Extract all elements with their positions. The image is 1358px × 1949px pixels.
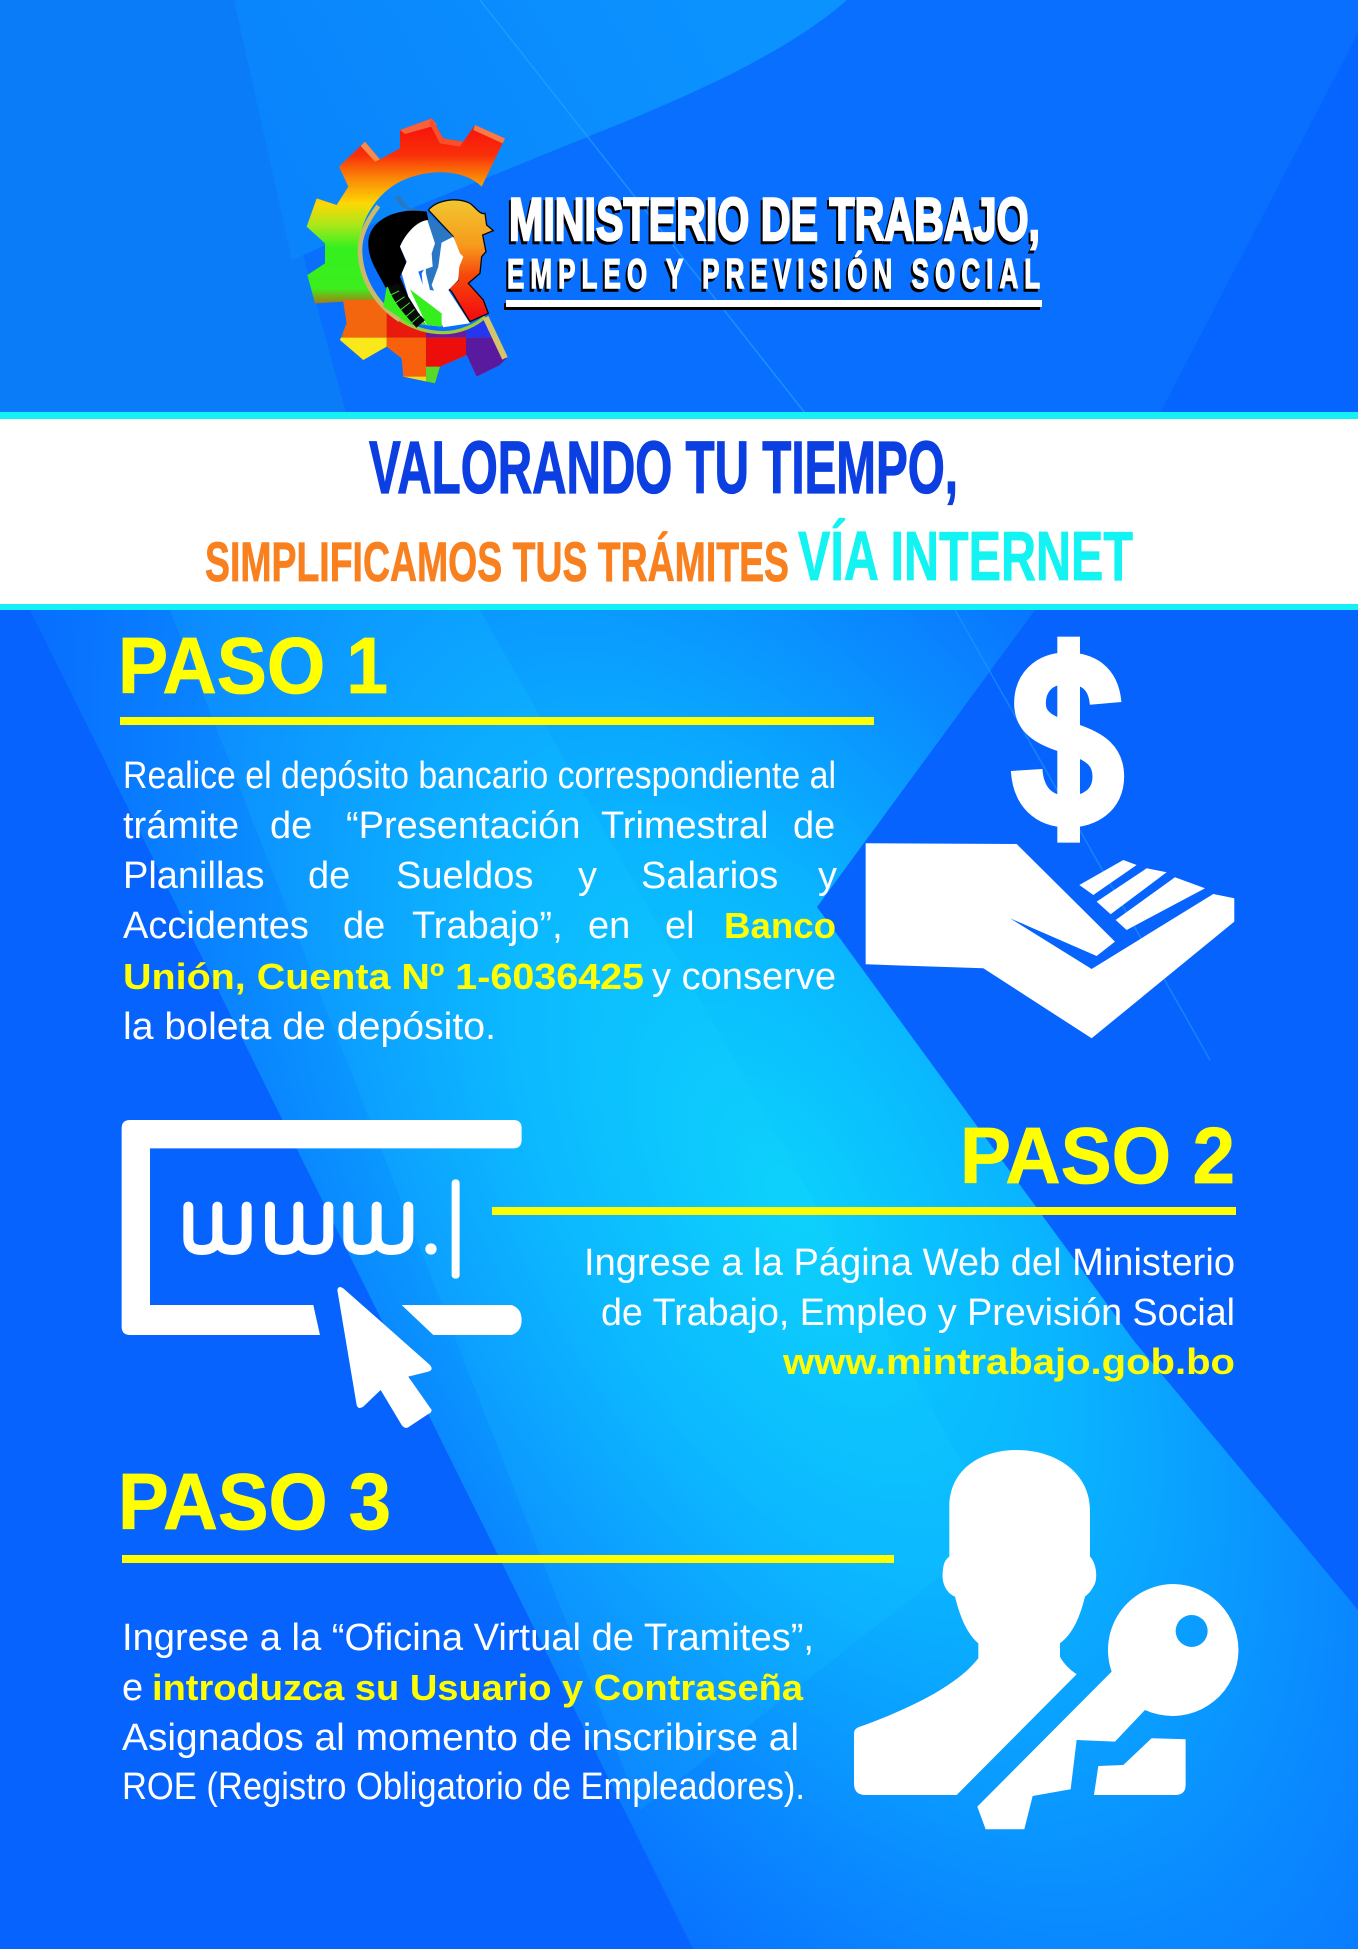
- text: paso 1 body: trámite: [123, 805, 239, 847]
- text: paso 1 body: y: [578, 855, 597, 897]
- heading: paso 1: PASO 1: [118, 621, 388, 710]
- figure: woman with braid: [368, 211, 428, 325]
- text: paso 1 body: Planillas: [123, 855, 265, 897]
- text: paso 3 body: introduzca su Usuario y Contraseña: [152, 1667, 804, 1708]
- text: paso 1 body: Salarios: [641, 855, 778, 897]
- logo text: ministry name: [506, 186, 1042, 307]
- heading: simplificamos: SIMPLIFICAMOS TUS TRÁMITES: [205, 530, 789, 593]
- heading: paso 2: PASO 2: [960, 1111, 1235, 1200]
- text: paso 1 body: de: [343, 905, 385, 947]
- heading: valorando tu tiempo: VALORANDO TU TIEMPO,: [369, 426, 958, 509]
- text: paso 1 body: de: [793, 805, 835, 847]
- text: paso 3 body: ROE (Registro Obligatorio de Empleadores).: [122, 1766, 805, 1808]
- text: paso 3 body: Asignados al momento de inscribirse al: [122, 1717, 799, 1759]
- gear ring: [307, 118, 508, 385]
- text: paso 1 body: la boleta de depósito.: [123, 1006, 496, 1048]
- text: paso 3 body: [122, 1617, 814, 1808]
- text: paso 1 body: el: [665, 905, 695, 947]
- title band: [0, 412, 1358, 610]
- logo: ministry gear emblem: [307, 118, 508, 385]
- text: paso 2 body: Ingrese a la Página Web del Ministerio: [584, 1242, 1235, 1284]
- text: paso 1 body: en: [588, 905, 630, 947]
- text: paso 3 body: Ingrese a la “Oficina Virtual de Tramites”,: [122, 1617, 814, 1659]
- text: paso 2 body: [584, 1242, 1235, 1382]
- logo text: ministry name: EMPLEO Y PREVISIÓN SOCIAL: [507, 250, 1040, 298]
- text: paso 1 body: Realice el depósito bancario correspondiente al: [123, 755, 836, 797]
- text: paso 3 body: e: [122, 1667, 143, 1709]
- panel: paso 3: [118, 1450, 1238, 1829]
- text: paso 2 body: www.mintrabajo.gob.bo: [782, 1341, 1235, 1382]
- text: paso 1 body: Sueldos: [396, 855, 533, 897]
- heading: paso 3: PASO 3: [118, 1457, 391, 1546]
- text: paso 1 body: Trabajo”,: [412, 905, 563, 947]
- text: paso 1 body: y: [818, 855, 837, 897]
- icon: browser address bar with cursor: [122, 1120, 522, 1428]
- panel: paso 2: [122, 1111, 1236, 1428]
- panel: paso 1: [118, 621, 1234, 1048]
- text: paso 2 body: de Trabajo, Empleo y Previsión Social: [601, 1292, 1235, 1334]
- figure: worker with helmet: [428, 200, 493, 322]
- icon: hand with dollar: [866, 637, 1234, 1038]
- text: paso 1 body: Trimestral: [601, 805, 768, 847]
- text: paso 1 body: y conserve: [652, 956, 836, 998]
- text: paso 1 body: Banco: [724, 905, 836, 946]
- text: paso 1 body: Unión, Cuenta Nº 1-6036425: [123, 956, 644, 997]
- text: paso 1 body: de: [308, 855, 350, 897]
- figure: woman with hat: [422, 237, 470, 327]
- text: paso 1 body: de: [270, 805, 312, 847]
- text: paso 1 body: [123, 755, 837, 1048]
- heading: via internet: VÍA INTERNET: [798, 517, 1133, 595]
- icon: user with key: [854, 1450, 1238, 1829]
- logo text: ministry name: MINISTERIO DE TRABAJO,: [509, 186, 1040, 253]
- text: paso 1 body: “Presentación: [346, 805, 580, 847]
- text: paso 1 body: Accidentes: [123, 905, 309, 947]
